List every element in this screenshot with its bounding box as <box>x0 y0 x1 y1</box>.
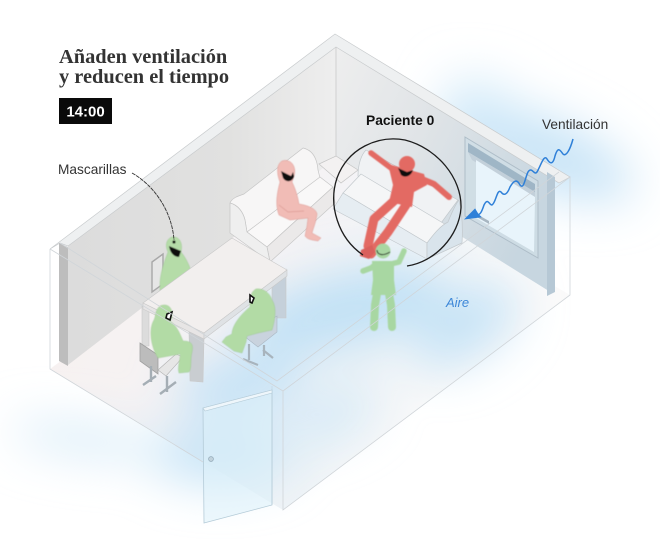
glass outer lines <box>50 172 570 510</box>
wall end: right pillar <box>547 172 555 296</box>
person: green seated, back <box>160 237 192 296</box>
person: pink seated <box>277 160 321 241</box>
wall top rim <box>50 34 570 249</box>
sofa along right wall <box>333 150 462 259</box>
person: green seated, right <box>222 289 275 353</box>
person: red patient 0 <box>360 153 449 259</box>
side table <box>319 156 358 183</box>
floor <box>50 158 570 510</box>
back-left wall <box>68 47 336 365</box>
person: green seated, left <box>151 305 193 373</box>
circle: highlight <box>334 139 461 266</box>
arrow: ventilation air <box>465 139 573 219</box>
time badge <box>59 98 112 124</box>
leader line: Mascarillas <box>132 173 174 240</box>
door <box>203 390 272 523</box>
time badge: 14:00 <box>66 104 105 120</box>
label: Paciente 0: Paciente 0 <box>366 113 435 128</box>
label: Mascarillas: Mascarillas <box>58 162 127 177</box>
label: Aire: Aire <box>445 295 469 310</box>
pillar: left wall end <box>59 243 68 366</box>
back-right wall <box>336 47 552 293</box>
air: blue haze <box>9 66 646 483</box>
title: y reducen el tiempo <box>59 66 229 88</box>
table <box>142 238 287 382</box>
title: Añaden ventilación <box>59 46 228 68</box>
person: green standing <box>363 244 404 327</box>
mask: right <box>250 295 254 303</box>
label: Ventilación: Ventilación <box>542 117 608 132</box>
chair: back left <box>152 254 163 292</box>
chair: left <box>140 343 183 394</box>
mask: left <box>166 312 172 320</box>
window <box>465 137 538 258</box>
sofa along left wall <box>230 148 335 262</box>
chair: right <box>240 316 277 365</box>
